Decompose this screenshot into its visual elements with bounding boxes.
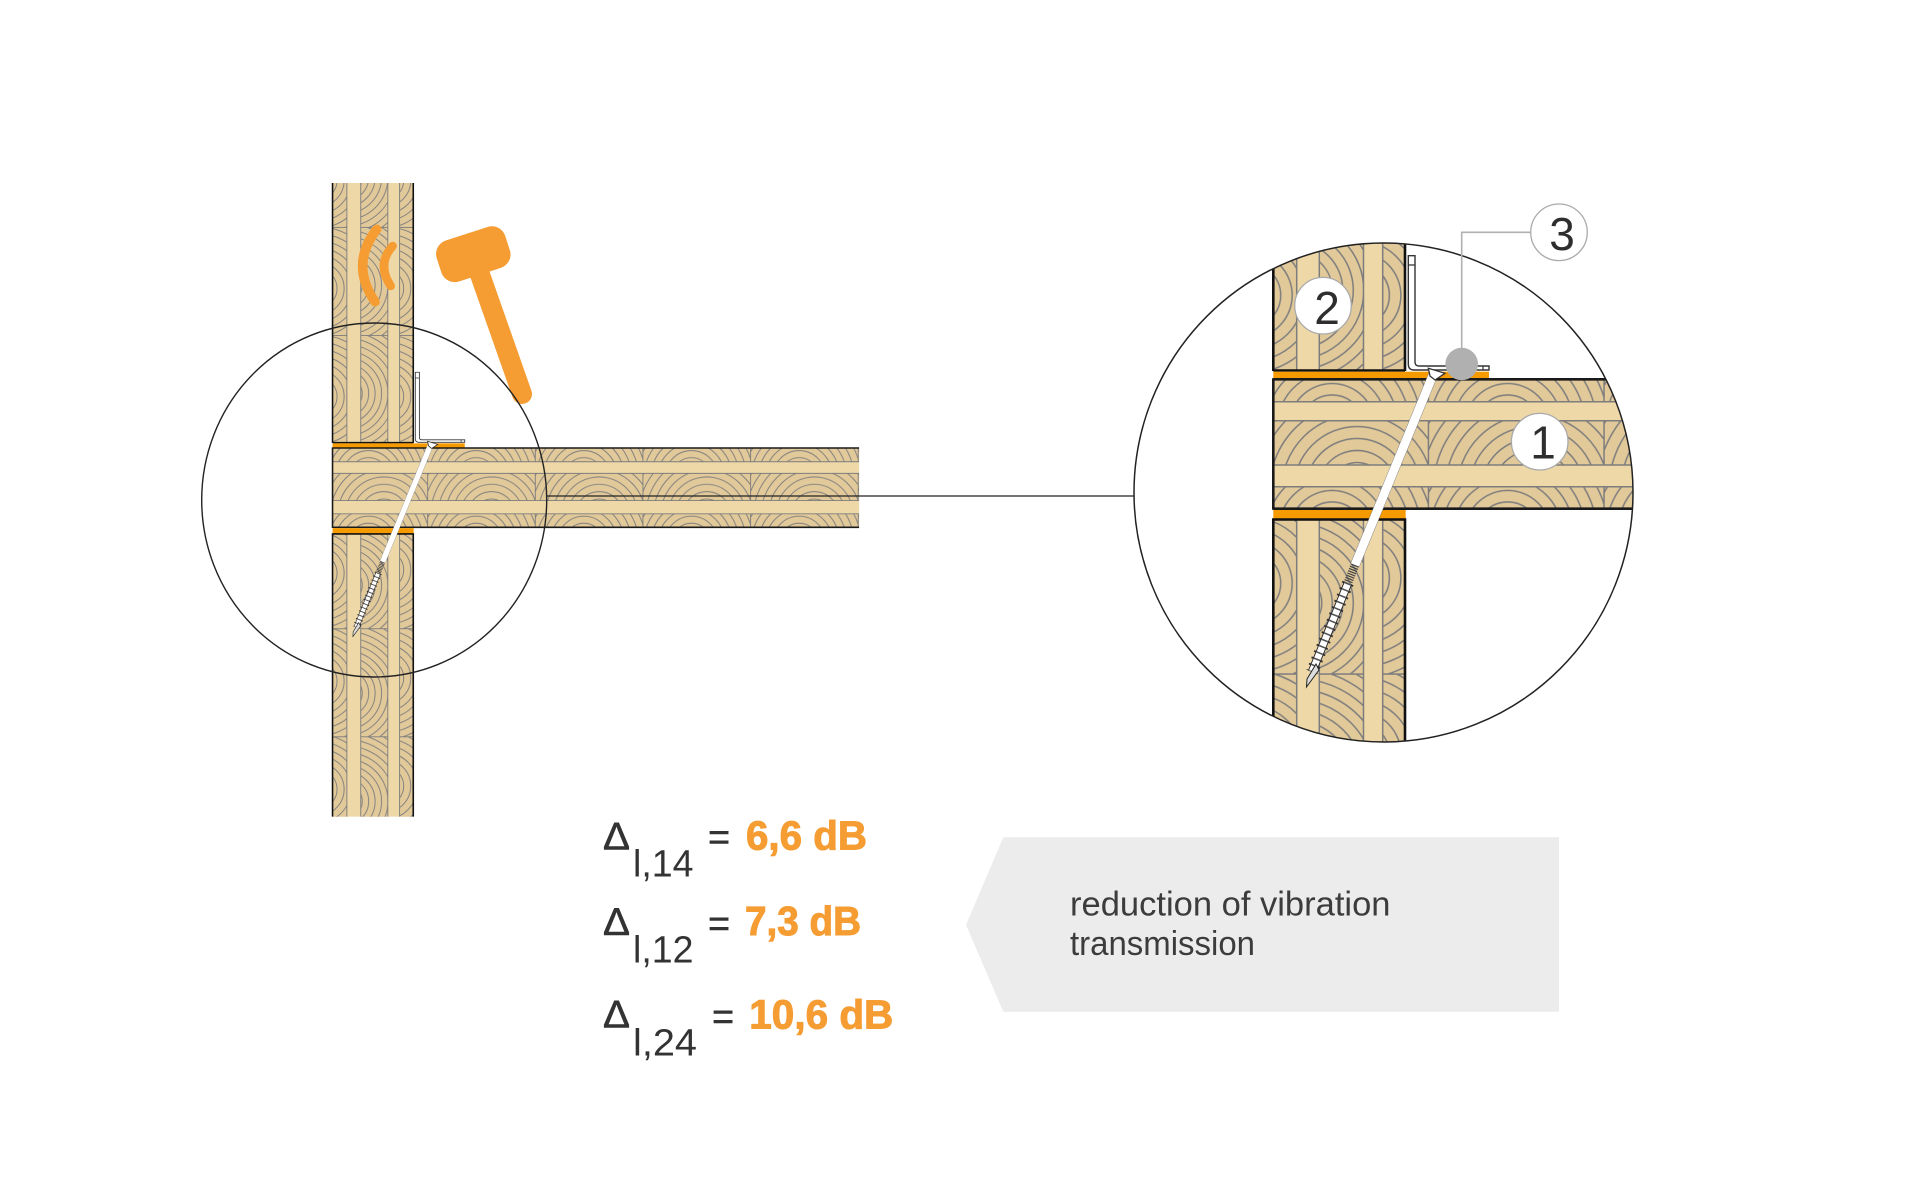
- formula: delta l,24: =: [712, 996, 734, 1038]
- callout: reduction of vibration transmission: reduction of vibration: [1070, 886, 1390, 924]
- icon: vibration waves: [363, 229, 393, 302]
- icon: hammer: [432, 223, 522, 394]
- formula: delta l,12: 7,3 dB: [745, 898, 861, 944]
- formula: delta l,14: [603, 812, 867, 886]
- formula: delta l,14: 6,6 dB: [746, 812, 867, 858]
- label 3: 3: [1549, 208, 1575, 260]
- connector line between the two circles: [547, 495, 1134, 497]
- formula: delta l,24: Δ: [603, 994, 630, 1037]
- label 2: 2: [1314, 282, 1340, 334]
- formula: delta l,14: Δ: [603, 815, 630, 858]
- detail circle on left diagram: [202, 323, 547, 677]
- label 2: [1295, 277, 1351, 334]
- label 3: [1531, 204, 1587, 261]
- formula: delta l,14: =: [708, 817, 730, 859]
- left diagram: wall and floor junction: [333, 183, 859, 817]
- callout: reduction of vibration transmission: transmission: [1070, 925, 1255, 963]
- leader line to label 3: [1462, 232, 1531, 350]
- grey marker dot: [1445, 348, 1478, 380]
- formula: delta l,24: 10,6 dB: [749, 991, 893, 1037]
- enlarged detail circle: [1133, 242, 1634, 743]
- formula: delta l,12: =: [708, 904, 730, 946]
- callout: reduction of vibration transmission: [966, 837, 1559, 1012]
- formula: delta l,24: l,24: [633, 1023, 697, 1065]
- formula: delta l,24: [603, 991, 893, 1065]
- formula: delta l,12: [603, 898, 861, 972]
- label 1: 1: [1530, 416, 1556, 468]
- label 1: [1511, 413, 1568, 470]
- formula: delta l,12: l,12: [633, 930, 694, 972]
- formula: delta l,14: l,14: [633, 844, 694, 886]
- formula: delta l,12: Δ: [603, 901, 630, 944]
